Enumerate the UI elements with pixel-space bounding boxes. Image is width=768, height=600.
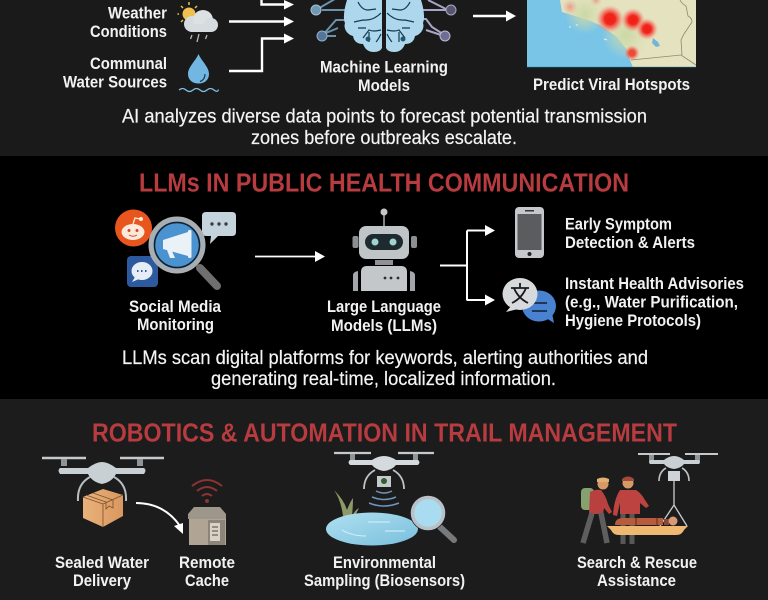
label: machine learning models: Models: [358, 77, 410, 95]
map: predicted viral hotspots: [527, 0, 696, 68]
text: llm description: [122, 348, 648, 390]
label: large language models: Large Language: [327, 298, 441, 316]
label: instant health advisories: (e.g., Water Purification,: [565, 294, 738, 312]
label: communal water sources: Water Sources: [63, 74, 167, 92]
arrow: package to cache: [136, 503, 183, 534]
panel: llms in public health communication: [0, 156, 768, 399]
panel: viral hotspot prediction: [0, 0, 768, 156]
arrow: water input: [229, 34, 294, 71]
arrow: branching outputs: [440, 225, 495, 306]
label: search and rescue assistance: Search & Rescue: [577, 554, 697, 572]
text: ai analysis description: zones before outbreaks escalate.: [251, 128, 517, 149]
icon: sun and rain cloud: [178, 2, 218, 42]
label: sealed water delivery: [55, 554, 150, 590]
arrow: social media to llms: [255, 251, 325, 262]
text: ai analysis description: [122, 106, 647, 149]
label: social media monitoring: Monitoring: [137, 316, 214, 334]
label: weather conditions: [90, 4, 168, 41]
icon: translation chat bubbles: [502, 278, 556, 323]
label: environmental sampling: Sampling (Biosensors): [304, 572, 465, 590]
label: communal water sources: [63, 55, 167, 92]
heading: llms in public health communication: LLMs IN PUBLIC HEALTH COMMUNICATION: [139, 170, 629, 198]
label: environmental sampling: Environmental: [333, 554, 436, 572]
icon: pond sampling drone: [326, 453, 454, 546]
label: instant health advisories: Hygiene Protocols): [565, 312, 701, 330]
icon: search and rescue: [581, 454, 718, 544]
icon: robot: [352, 208, 417, 291]
label: communal water sources: Communal: [90, 55, 167, 73]
icon: water drop: [179, 54, 218, 92]
label: search and rescue assistance: Assistance: [597, 572, 676, 590]
arrow: top input: [262, 0, 294, 10]
label: weather conditions: Conditions: [90, 23, 167, 41]
label: weather conditions: Weather: [108, 4, 168, 22]
text: ai analysis description: AI analyzes diverse data points to forecast potential transmission: [122, 106, 647, 128]
label: predict viral hotspots: Predict Viral Hotspots: [533, 76, 690, 94]
icon: remote cache with signal: [188, 480, 226, 545]
arrow: weather input: [229, 16, 294, 26]
icon: machine learning brain: [311, 0, 456, 52]
label: social media monitoring: Social Media: [129, 298, 222, 316]
label: social media monitoring: [129, 298, 222, 334]
label: large language models: [327, 298, 441, 335]
panel: robotics and automation in trail management: [0, 399, 768, 600]
icon: smartphone: [515, 207, 544, 258]
label: sealed water delivery: Delivery: [73, 572, 132, 590]
text: llm description: generating real-time, localized information.: [211, 369, 556, 390]
label: early symptom detection: [565, 216, 695, 252]
label: remote cache: Remote: [179, 554, 235, 572]
label: environmental sampling: [304, 554, 465, 590]
label: instant health advisories: Instant Health Advisories: [565, 275, 744, 293]
label: early symptom detection: Detection & Alerts: [565, 234, 695, 252]
label: machine learning models: [320, 58, 448, 95]
label: early symptom detection: Early Symptom: [565, 216, 672, 234]
arrow: to map: [473, 10, 516, 22]
label: remote cache: Cache: [185, 572, 229, 590]
label: large language models: Models (LLMs): [331, 317, 437, 335]
text: llm description: LLMs scan digital platforms for keywords, alerting authorities and: [122, 348, 648, 369]
label: search and rescue assistance: [577, 554, 697, 590]
label: remote cache: [179, 554, 235, 590]
label: sealed water delivery: Sealed Water: [55, 554, 150, 572]
icon: social media magnifier: [115, 210, 236, 287]
icon: delivery drone with package: [42, 458, 164, 527]
label: machine learning models: Machine Learning: [320, 58, 448, 76]
label: instant health advisories: [565, 275, 744, 330]
heading: robotics and automation: ROBOTICS & AUTOMATION IN TRAIL MANAGEMENT: [92, 418, 677, 448]
